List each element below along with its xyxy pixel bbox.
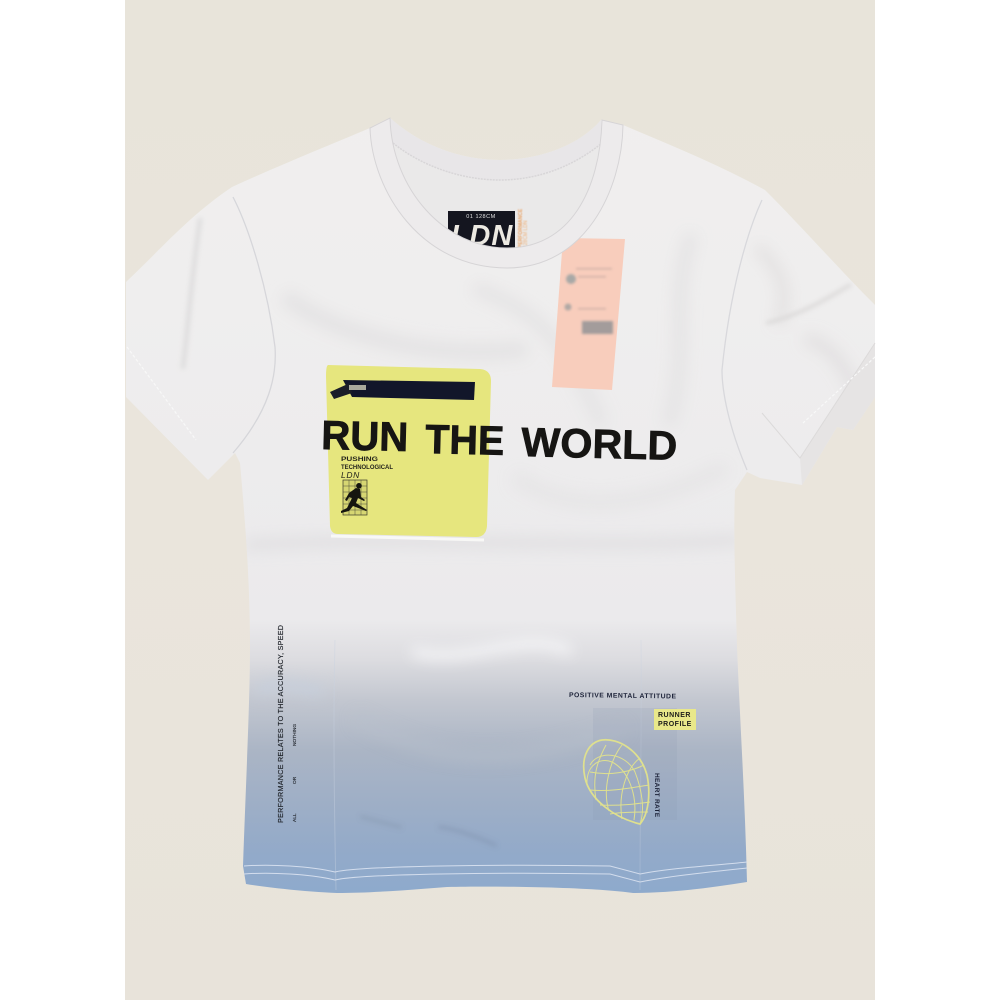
zipper <box>343 380 475 400</box>
orange size text: 128CM LDN <box>523 220 529 248</box>
orange size text: PERFORMANCE <box>518 208 524 248</box>
headline: WORLD <box>521 419 678 469</box>
front collar band <box>370 118 623 268</box>
heart rate vertical text: HEART RATE <box>653 773 660 818</box>
wireframe heart graphic <box>584 740 650 824</box>
fabric shading <box>183 220 860 890</box>
runner profile badge: PROFILE <box>658 721 692 728</box>
sleeve seams <box>233 197 275 453</box>
hem stitching <box>244 862 747 874</box>
price tag: pink sticker <box>552 238 625 390</box>
pocket small text: LDN <box>341 470 360 480</box>
neck label <box>448 208 529 252</box>
yellow zip pocket <box>326 365 491 540</box>
neck label: LDN <box>451 220 513 252</box>
pocket small text: TECHNOLOGICAL <box>341 464 393 471</box>
collar ribbing <box>370 118 623 268</box>
vertical text: left side: ALL <box>292 813 298 822</box>
headline: RUN <box>321 412 409 460</box>
t-shirt <box>126 118 875 893</box>
vertical text: left side: OR <box>292 776 298 784</box>
vertical text: left side: NOTHING <box>292 724 298 746</box>
vertical text: left side <box>276 625 298 823</box>
headline <box>321 412 678 469</box>
shirt body <box>126 118 875 893</box>
pocket small text: PUSHING <box>341 456 378 463</box>
runner icon <box>341 480 367 515</box>
under layer of the right sleeve <box>800 343 875 485</box>
cuff stitching <box>127 347 196 440</box>
runner profile badge: RUNNER <box>658 712 691 719</box>
positive mental attitude text: POSITIVE MENTAL ATTITUDE <box>569 692 677 701</box>
back collar band <box>390 118 602 180</box>
inside of the neck <box>390 118 601 250</box>
pocket small text <box>341 456 393 480</box>
vertical side creases <box>334 640 336 890</box>
photo background <box>125 0 875 1000</box>
darker print rectangle behind graphic <box>593 708 677 820</box>
headline: THE <box>425 416 505 464</box>
runner profile badge <box>654 709 696 730</box>
vertical text: left side: PERFORMANCE RELATES TO THE ACCURACY, SPEED <box>276 625 285 823</box>
neck label: 01 128CM <box>466 214 496 220</box>
orange size text <box>518 208 529 248</box>
